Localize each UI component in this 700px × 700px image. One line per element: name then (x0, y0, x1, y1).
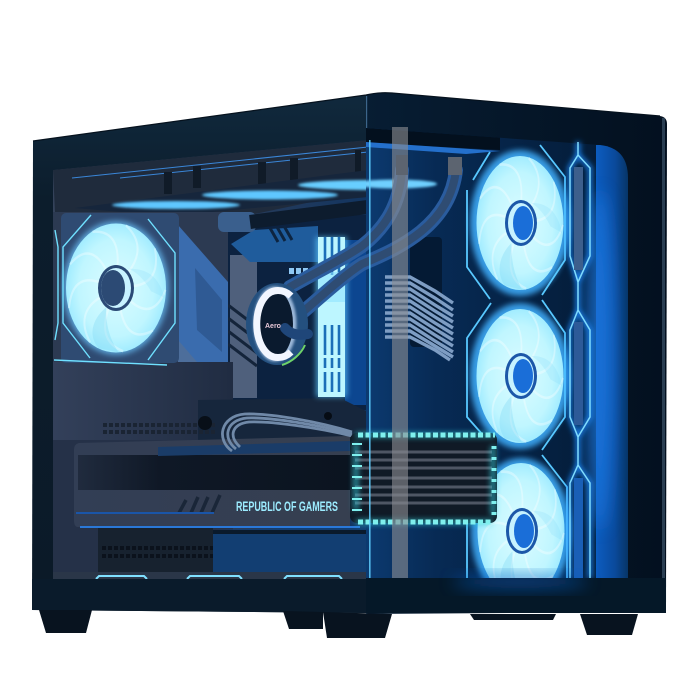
GPU blue line (76, 512, 214, 514)
case feet (39, 610, 638, 638)
right bezel bottom (366, 578, 666, 613)
top fan 2 glow (202, 190, 338, 200)
pump cap (259, 291, 293, 357)
vertical pole (392, 127, 408, 580)
foot center bar (470, 614, 556, 620)
tower body shadow (72, 212, 222, 215)
fan hub (505, 200, 537, 246)
middle right fan (470, 303, 570, 449)
pump stub tube (285, 328, 308, 335)
left fan LED frame (54, 215, 175, 365)
LED column left (352, 443, 362, 512)
connector slot three (574, 478, 583, 578)
io holes row (289, 268, 308, 274)
GPU power cable (222, 414, 352, 451)
left fan glow (63, 221, 169, 355)
shroud lower bevel (178, 342, 197, 362)
right fan LED frames (467, 145, 567, 578)
GPU shroud (74, 436, 350, 527)
heatsink fins (355, 452, 492, 503)
right window light (596, 145, 630, 580)
top fans mounting shelf (53, 140, 368, 215)
cable ribs (218, 212, 256, 232)
GPU graphics card (74, 414, 360, 528)
PSU shroud strip (98, 572, 366, 579)
connector slot two (574, 322, 583, 425)
pump green accent (282, 345, 305, 365)
pump light ring (257, 290, 291, 358)
GPU top pcb (158, 441, 350, 456)
LED row glow (356, 435, 495, 522)
GPU vent band (78, 455, 350, 490)
vrm heatsink (231, 226, 318, 262)
fan blades (474, 308, 565, 447)
heatsink stripes (270, 226, 292, 242)
motherboard lower band (198, 398, 366, 440)
GPU heatsink with LED ring (350, 433, 497, 523)
motherboard (228, 215, 368, 410)
CPU water cooler tubes (285, 170, 456, 327)
pump logo: Aero (265, 323, 281, 330)
inner plate (195, 268, 222, 352)
right edge strip (662, 118, 665, 610)
LED row bottom (358, 520, 492, 524)
pump glow (257, 290, 293, 358)
upper vent dots (103, 425, 215, 432)
glass edge light (369, 140, 371, 580)
lower vent dots (102, 548, 213, 556)
motherboard shroud panel (178, 226, 228, 362)
RAM glow (316, 237, 347, 397)
fan hub (506, 508, 538, 554)
fan hub (505, 353, 537, 399)
top right fan (470, 150, 570, 296)
bottom right fan (471, 458, 571, 604)
left side panel (32, 95, 366, 613)
right side panel (366, 93, 667, 614)
shelf blue band (366, 142, 500, 154)
right connector LED strips (570, 142, 590, 578)
board strip (213, 530, 368, 534)
motherboard right glow (345, 240, 366, 405)
GPU underglow (80, 526, 360, 528)
top fan light continuing (353, 180, 437, 188)
board hole right (324, 412, 332, 420)
backplate stripes (228, 305, 257, 366)
foot front left (39, 610, 92, 633)
top fan disc (78, 170, 366, 212)
fan blades (475, 462, 566, 603)
left fan hub (98, 265, 134, 311)
case body (32, 93, 667, 614)
CPU pump head (246, 283, 308, 365)
lower bezel (32, 575, 666, 613)
panel below GPU (53, 440, 233, 580)
dark cable (250, 207, 368, 222)
GPU stripes (179, 495, 220, 513)
infographic: glass PC case with blue RGB lighting (32, 92, 667, 638)
left bezel bottom (32, 579, 366, 613)
LED column right (492, 446, 496, 515)
front glass edge (366, 96, 367, 614)
strip glow (570, 142, 590, 578)
lower case shroud (120, 362, 233, 440)
top edge highlight (33, 93, 660, 141)
right interior window (353, 125, 630, 580)
dark under-GPU block (98, 525, 213, 573)
bottom LED strips (96, 576, 342, 579)
RAM notches (325, 237, 339, 392)
grey backplate column (230, 255, 257, 398)
foot front middle (323, 612, 392, 638)
fan floor glow (452, 575, 588, 589)
strip lines (570, 142, 590, 578)
dark cable hole (410, 237, 442, 347)
foot rear middle (283, 611, 323, 629)
tube fittings (396, 155, 462, 175)
left fan (54, 213, 179, 365)
GPU logo text: REPUBLIC OF GAMERS (236, 499, 338, 514)
top fan brackets (164, 150, 361, 194)
top fan 3 glow (296, 178, 366, 192)
left fan blades (63, 222, 168, 356)
board cooling hole (198, 416, 212, 430)
LED row top (358, 432, 495, 438)
PSU cable comb (385, 277, 453, 360)
left fan frame (61, 213, 179, 363)
top fan 1 glow (112, 201, 240, 209)
left interior window (53, 140, 366, 579)
fan blades (474, 155, 565, 294)
right interior upper shelf (366, 128, 500, 150)
foot right (580, 614, 638, 635)
top rail lines (72, 147, 368, 178)
window glow spot (586, 190, 614, 530)
connector slot one (574, 167, 583, 270)
lower board section (213, 526, 368, 572)
RAM modules (316, 237, 347, 397)
